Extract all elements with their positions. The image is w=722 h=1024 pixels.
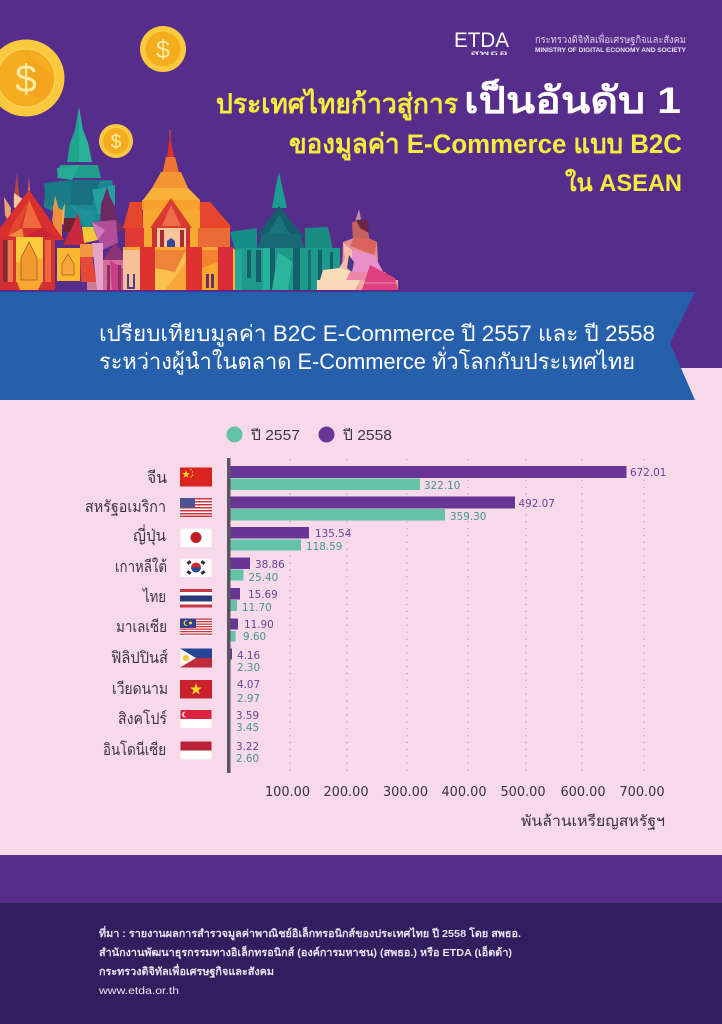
country labels: จีน [147,469,167,487]
Buddha statue [317,209,398,290]
country labels: เวียดนาม [112,680,168,698]
icon: medium gold coin: $ [156,36,170,64]
value labels: 492.07 [518,498,555,510]
green stupa [44,107,115,240]
icon: flag USA [180,498,212,517]
axis [227,458,230,773]
icon: small gold coin [99,124,133,158]
value labels: 118.59 [306,541,342,553]
illustration: low-poly Thai temples [0,107,398,290]
logo: ETDA: ETDA [454,29,509,52]
icon: flag Indonesia [180,742,212,760]
title: ประเทศไทยก้าวสู่การ [216,88,458,121]
axis labels: 400.00 [441,785,487,800]
bars: 2558 [230,466,626,660]
value labels: 2.60 [236,753,259,765]
icon: flag Singapore [180,710,212,728]
value labels: 135.54 [315,528,352,540]
source text: ที่มา : รายงานผลการสำรวจมูลค่าพาณิชย์อิเล็กทรอนิกส์ของประเทศไทย ปี 2558 โดย สพธอ. [99,925,521,941]
legend: ปี 2558 [343,427,392,444]
country labels: ฟิลิปปินส์ [111,648,168,667]
icon: flag Malaysia [180,618,212,636]
small magenta pagoda [92,187,128,290]
axis labels: 600.00 [560,785,606,800]
value labels: 9.60 [243,631,266,643]
icon: flag Japan [180,528,212,547]
legend: ปี 2557 [251,427,300,444]
axis labels: 700.00 [619,785,665,800]
icon: flag China [180,468,212,486]
logo: ETDA: สพธอ [470,50,509,57]
banner heading: ระหว่างผู้นำในตลาด E-Commerce ทั่วโลกกับประเทศไทย [99,346,635,375]
value labels: 3.45 [236,722,259,734]
value labels: 15.69 [248,589,278,601]
axis unit: พันล้านเหรียญสหรัฐฯ [521,813,665,830]
icon: flag Thailand [180,589,212,608]
legend [226,426,392,444]
icon: flag South Korea [180,558,212,577]
value labels: 38.86 [255,559,285,571]
value labels: 3.22 [236,741,259,753]
value labels: 2.97 [237,693,260,705]
bars: 2557 [230,478,445,642]
country labels: สิงคโปร์ [118,709,167,728]
value labels: 672.01 [630,467,666,479]
value labels: 25.40 [248,572,278,584]
bar chart [227,458,666,830]
country labels: ญี่ปุ่น [133,524,166,546]
axis labels: 200.00 [323,785,369,800]
country labels: อินโดนีเซีย [103,740,166,759]
central orange temple [123,130,258,290]
logo: ministry name [535,32,687,54]
title: ของมูลค่า E-Commerce แบบ B2C [289,129,682,161]
left red temple [0,173,98,290]
value labels: 4.07 [237,679,260,691]
country labels: สหรัฐอเมริกา [85,499,166,516]
icon: medium gold coin [140,26,186,72]
source text: www.etda.or.th [98,985,179,997]
value labels: 11.70 [242,602,272,614]
source text: สำนักงานพัฒนาธุรกรรมทางอิเล็กทรอนิกส์ (องค์การมหาชน) (สพธอ.) หรือ ETDA (เอ็ตด้า) [99,945,512,960]
title [216,77,682,197]
country labels: ไทย [141,587,166,606]
value labels: 322.10 [424,480,460,492]
banner [0,292,695,400]
axis labels: 100.00 [265,785,310,800]
icon: small gold coin: $ [111,132,122,153]
value labels: 2.30 [237,662,260,674]
axis labels: 500.00 [500,785,546,800]
country labels: เกาหลีใต้ [115,557,167,576]
axis labels [265,785,665,800]
logo: ministry name: MINISTRY OF DIGITAL ECONOMY AND SOCIETY [535,47,687,54]
value labels: 359.30 [450,511,486,523]
source text [98,925,521,997]
title: ใน ASEAN [565,168,682,197]
title: เป็นอันดับ 1 [464,77,681,121]
axis labels: 300.00 [383,785,428,800]
country labels [85,469,168,759]
logo: ministry name: กระทรวงดิจิทัลเพื่อเศรษฐกิจและสังคม [535,32,686,46]
country labels: มาเลเซีย [116,618,167,636]
value labels: 11.90 [244,619,274,631]
right green temple [230,172,340,290]
banner heading [99,321,655,375]
value labels [236,467,666,765]
source text: กระทรวงดิจิทัลเพื่อเศรษฐกิจและสังคม [99,963,274,978]
value labels: 3.59 [236,710,259,722]
icon: large gold coin [0,40,64,116]
banner heading: เปรียบเทียบมูลค่า B2C E-Commerce ปี 2557 และ ปี 2558 [99,321,655,347]
icon: large gold coin: $ [15,58,37,101]
icon: flag Vietnam [180,680,212,698]
value labels: 4.16 [237,650,260,662]
icon: flag Philippines [180,648,212,668]
